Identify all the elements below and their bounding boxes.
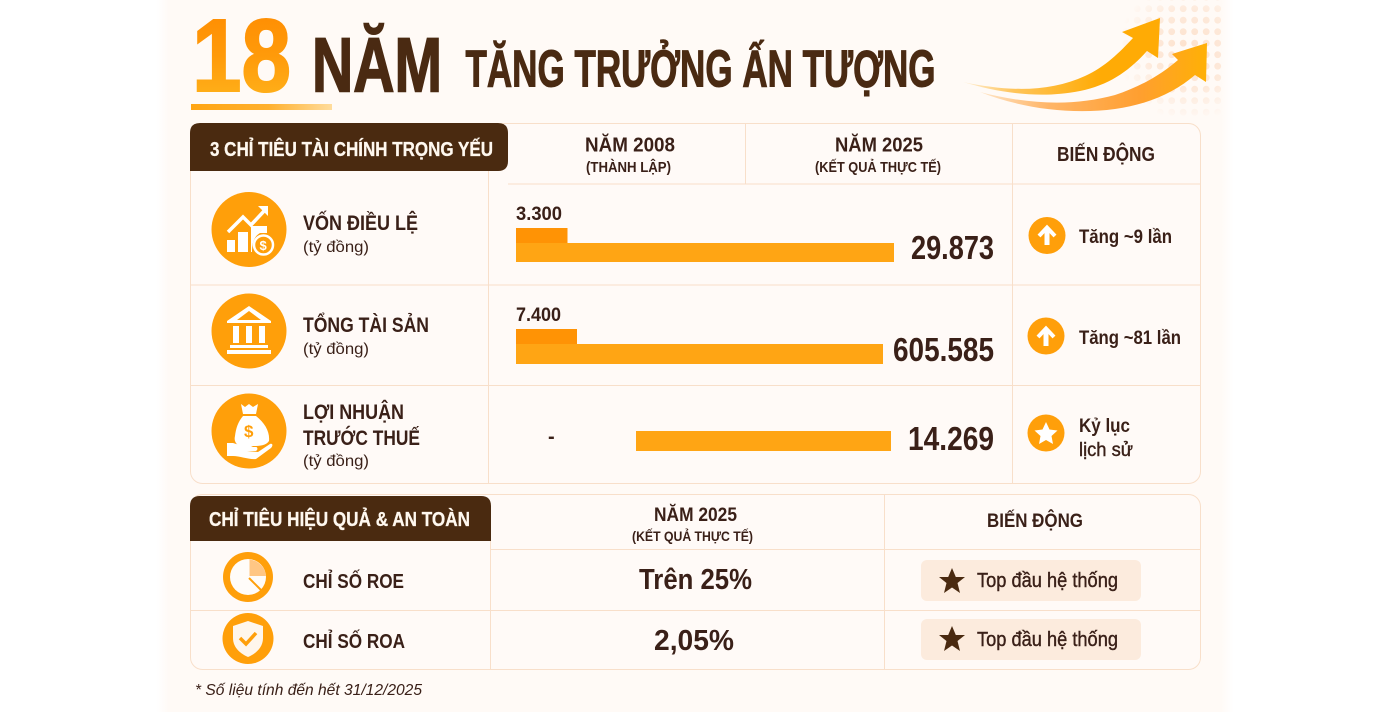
change: up 9 times [1028, 217, 1172, 254]
icon: profit money bag: $ [244, 422, 254, 441]
title: 18 [192, 0, 291, 113]
label: total assets [303, 313, 429, 358]
column header: 2008 [585, 134, 675, 176]
table: 3 financial indicators [190, 123, 1200, 484]
bar chart: charter capital: 29.873 [911, 230, 994, 267]
bar chart: charter capital: 3.300 [516, 204, 562, 225]
icon: charter capital [212, 192, 286, 267]
bar chart: total assets [516, 305, 994, 369]
change: up 9 times: Tăng ~9 lần [1079, 227, 1172, 248]
column header: 2025 [632, 504, 753, 544]
column header: 2008: NĂM 2008 [585, 134, 675, 156]
heading: 3 financial indicators: 3 CHỈ TIÊU TÀI CHÍNH TRỌNG YẾU [210, 137, 493, 161]
heading: 3 financial indicators [190, 123, 508, 171]
title underline [191, 104, 332, 110]
halftone dots decoration [1128, 0, 1221, 113]
bar chart: profit before tax [548, 421, 994, 458]
label: charter capital: (tỷ đồng) [303, 239, 369, 256]
bar chart: profit before tax: - [548, 426, 555, 448]
badge: top of system ROA [921, 619, 1141, 660]
label: profit before tax [303, 400, 420, 470]
table: efficiency and safety [190, 494, 1200, 670]
heading: efficiency and safety [190, 496, 491, 541]
title: TĂNG TRƯỞNG ẤN TƯỢNG [466, 40, 936, 98]
change: historic record [1028, 414, 1133, 461]
heading: efficiency and safety: CHỈ TIÊU HIỆU QUẢ & AN TOÀN [209, 507, 470, 531]
value: ROE: Trên 25% [639, 564, 752, 596]
label: total assets: (tỷ đồng) [303, 341, 369, 358]
label: ROA: CHỈ SỐ ROA [303, 629, 405, 653]
label: charter capital: VỐN ĐIỀU LỆ [303, 211, 418, 235]
change: historic record: Kỷ lục [1079, 416, 1130, 437]
change: up 81 times [1028, 318, 1181, 354]
icon: total assets [212, 294, 286, 368]
change: historic record: lịch sử [1079, 440, 1133, 461]
column header: change: BIẾN ĐỘNG [987, 510, 1083, 532]
label: profit before tax: LỢI NHUẬN [303, 400, 404, 424]
label: total assets: TỔNG TÀI SẢN [303, 313, 429, 337]
icon: shield [222, 613, 274, 664]
title: NĂM [312, 22, 442, 108]
bar chart: total assets: 605.585 [893, 332, 994, 369]
badge: top of system ROA: Top đầu hệ thống [977, 629, 1118, 651]
label: profit before tax: TRƯỚC THUẾ [303, 426, 420, 450]
icon: pie chart [223, 552, 273, 602]
footnote: * Số liệu tính đến hết 31/12/2025 [195, 682, 422, 699]
icon: profit money bag [212, 394, 286, 468]
icon: growth arrows [963, 18, 1207, 111]
icon: charter capital: $ [260, 238, 268, 253]
column header: 2008: (THÀNH LẬP) [586, 158, 671, 176]
badge: top of system ROE: Top đầu hệ thống [977, 570, 1118, 592]
label: profit before tax: (tỷ đồng) [303, 453, 369, 470]
column header: 2025: NĂM 2025 [835, 134, 923, 156]
label: charter capital [303, 211, 418, 256]
column header: 2025: NĂM 2025 [654, 504, 737, 526]
title [192, 0, 936, 113]
column header: change: BIẾN ĐỘNG [1057, 142, 1155, 166]
column header: 2025 [815, 134, 941, 176]
change: up 81 times: Tăng ~81 lần [1079, 328, 1181, 349]
column header: 2025: (KẾT QUẢ THỰC TẾ) [632, 528, 753, 544]
bar chart: profit before tax: 14.269 [908, 421, 994, 458]
value: ROA: 2,05% [654, 625, 734, 657]
column header: 2025: (KẾT QUẢ THỰC TẾ) [815, 159, 941, 176]
bar chart: total assets: 7.400 [516, 305, 561, 326]
bar chart: charter capital [516, 204, 994, 267]
badge: top of system ROE [921, 560, 1141, 601]
label: ROE: CHỈ SỐ ROE [303, 569, 404, 593]
background panel [156, 0, 1234, 712]
